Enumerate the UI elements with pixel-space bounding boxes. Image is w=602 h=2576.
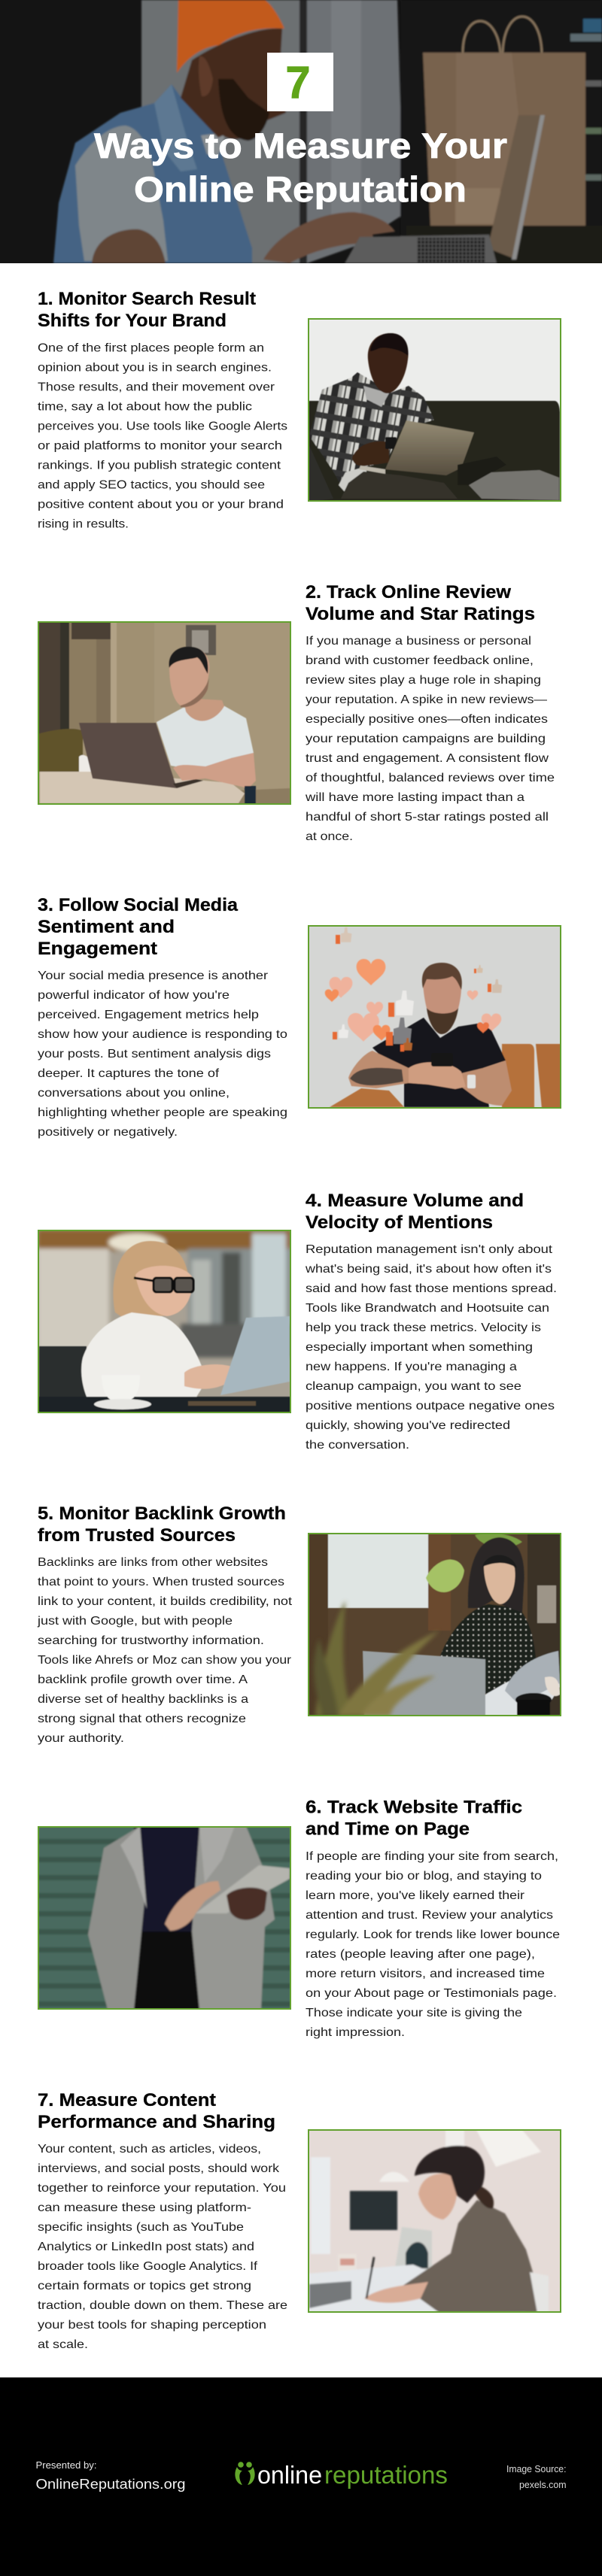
hero background photo [0, 0, 602, 263]
body text 2: your reputation. A spike in new reviews— [306, 693, 547, 706]
heading 2: 2. Track Online Review [306, 582, 511, 602]
body text 6: If people are finding your site from search, [306, 1850, 558, 1863]
body text 7: Analytics or LinkedIn post stats) and [38, 2241, 254, 2253]
photo 4: woman with glasses in office [39, 1231, 290, 1412]
body text 7: certain formats or topics get strong [38, 2280, 251, 2292]
body text 1: or paid platforms to monitor your search [38, 439, 282, 453]
heading 2: Volume and Star Ratings [306, 604, 535, 624]
body text 3: conversations about you online, [38, 1087, 230, 1100]
body text 3: positively or negatively. [38, 1126, 178, 1139]
heading 7: Performance and Sharing [38, 2112, 275, 2132]
section 5 [37, 1503, 561, 1745]
section 6 [38, 1798, 560, 2039]
body text 7: together to reinforce your reputation. You [38, 2182, 286, 2195]
photo 1: man on sofa with laptop [309, 320, 560, 500]
heading 5: 5. Monitor Backlink Growth [38, 1503, 286, 1524]
body text 6: attention and trust. Review your analytics [306, 1909, 553, 1922]
body text 5: diverse set of healthy backlinks is a [38, 1693, 248, 1706]
body text 7: Your content, such as articles, videos, [38, 2143, 261, 2156]
logo icon: two figures [235, 2462, 255, 2485]
body text 7: at scale. [38, 2338, 88, 2351]
body text 7: specific insights (such as YouTube [38, 2221, 244, 2234]
heading 6: 6. Track Website Traffic [306, 1798, 522, 1817]
body text 6: on your About page or Testimonials page. [306, 1987, 557, 2000]
body text 5: just with Google, but with people [37, 1615, 233, 1628]
body text 3: perceived. Engagement metrics help [38, 1009, 259, 1021]
heading 6: and Time on Page [306, 1819, 470, 1840]
body text 3: show how your audience is responding to [38, 1028, 287, 1041]
title: Ways to Measure Your [94, 126, 507, 165]
image source: Image Source: [506, 2463, 566, 2474]
body text 5: Tools like Ahrefs or Moz can show you your [38, 1654, 291, 1667]
heading 7: 7. Measure Content [38, 2090, 216, 2110]
body text 6 [306, 1850, 560, 2039]
body text 7: your best tools for shaping perception [38, 2319, 266, 2332]
photo 4 border [38, 1230, 290, 1412]
body text 1: positive content about you or your brand [38, 498, 284, 511]
heading 5: from Trusted Sources [38, 1525, 236, 1546]
photo 2 border [38, 622, 290, 804]
body text 1: rising in results. [38, 517, 129, 531]
presented by: OnlineReputations.org [36, 2476, 185, 2492]
footer background [0, 2377, 602, 2576]
heading 4: 4. Measure Volume and [306, 1191, 524, 1211]
body text 2 [305, 635, 555, 843]
heading 3 [38, 895, 239, 959]
hero banner [0, 0, 602, 263]
section 3 [38, 895, 561, 1139]
section 4 [38, 1191, 557, 1452]
heading 1: Shifts for Your Brand [38, 311, 227, 331]
body text 4: said and how fast those mentions spread. [306, 1282, 557, 1295]
section 1 [38, 289, 561, 531]
image source: pexels.com [519, 2479, 566, 2490]
body text 1: rankings. If you publish strategic content [38, 459, 281, 472]
body text 3 [38, 969, 287, 1139]
body text 4: the conversation. [306, 1439, 409, 1452]
body text 5: Backlinks are links from other websites [38, 1556, 268, 1569]
body text 7: broader tools like Google Analytics. If [38, 2260, 258, 2273]
photo 5 border [309, 1534, 561, 1716]
body text 6: right impression. [306, 2026, 405, 2039]
heading 4: Velocity of Mentions [306, 1212, 493, 1233]
photo 1 border [309, 319, 561, 501]
photo 5: woman reading beside plant [309, 1534, 560, 1715]
logo wordmark: reputations [324, 2461, 448, 2489]
body text 3: Your social media presence is another [38, 969, 268, 982]
body text 7: traction, double down on them. These are [38, 2299, 287, 2312]
body text 1: Those results, and their movement over [38, 381, 275, 394]
body text 5: searching for trustworthy information. [38, 1634, 264, 1647]
body text 3: highlighting whether people are speaking [38, 1106, 287, 1119]
body text 1: opinion about you is in search engines. [38, 361, 272, 375]
body text 2: handful of short 5-star ratings posted all [306, 811, 549, 824]
body text 5: backlink profile growth over time. A [38, 1673, 248, 1686]
body text 2: brand with customer feedback online, [306, 654, 534, 667]
body text 1: and apply SEO tactics, you should see [38, 478, 265, 492]
body text 5: that point to yours. When trusted sources [38, 1576, 284, 1588]
body text 2: your reputation campaigns are building [306, 733, 546, 745]
body text 7: can measure these using platform- [38, 2201, 251, 2214]
heading 6 [306, 1798, 522, 1840]
presented by: Presented by: [36, 2459, 96, 2471]
heading 3: 3. Follow Social Media [38, 895, 239, 915]
photo 3: man with phone, hearts and thumbs [309, 927, 560, 1107]
body text 6: reading your bio or blog, and staying to [306, 1870, 542, 1883]
body text 4: cleanup campaign, you want to see [306, 1380, 521, 1393]
body text 1: One of the first places people form an [38, 341, 264, 355]
body text 5: your authority. [38, 1732, 124, 1745]
body text 5 [37, 1556, 293, 1745]
body text 1: perceives you. Use tools like Google Alerts [38, 420, 287, 433]
body text 4: what's being said, it's about how often it's [305, 1263, 552, 1276]
logo wordmark [257, 2461, 448, 2489]
body text 7: interviews, and social posts, should work [38, 2162, 279, 2175]
heading 4 [306, 1191, 524, 1233]
heading 2 [306, 582, 535, 624]
body text 6: rates (people leaving after one page), [306, 1948, 535, 1961]
badge with number 7: 7 [286, 57, 310, 108]
body text 5: strong signal that others recognize [38, 1713, 246, 1725]
section 2 [38, 582, 555, 843]
heading 3: Engagement [38, 939, 157, 959]
body text 4: Reputation management isn't only about [306, 1243, 553, 1256]
body text 4: Tools like Brandwatch and Hootsuite can [306, 1302, 549, 1315]
title: Online Reputation [134, 169, 467, 209]
body text 6: more return visitors, and increased time [306, 1968, 545, 1980]
body text 2: trust and engagement. A consistent flow [306, 752, 549, 765]
photo 7 border [309, 2130, 561, 2312]
image source [506, 2463, 566, 2490]
body text 2: especially positive ones—often indicates [306, 713, 548, 726]
body text 3: your posts. But sentiment analysis digs [38, 1048, 271, 1060]
section 7 [38, 2090, 561, 2351]
body text 6: regularly. Look for trends like lower bounce [306, 1928, 560, 1941]
body text 5: link to your content, it builds credibility, not [38, 1595, 293, 1608]
title [94, 126, 507, 209]
presented by [36, 2459, 185, 2492]
photo 6: person in grey coat with tablet [39, 1828, 290, 2008]
heading 1 [38, 289, 256, 331]
body text 4 [305, 1243, 557, 1452]
body text 7 [38, 2143, 287, 2351]
logo [235, 2461, 448, 2489]
body text 1: time, say a lot about how the public [38, 400, 252, 414]
heading 7 [38, 2090, 275, 2132]
photo 3 border [309, 926, 561, 1108]
body text 4: quickly, showing you've redirected [306, 1419, 510, 1432]
body text 6: learn more, you've likely earned their [306, 1889, 524, 1902]
footer [0, 2377, 602, 2576]
body text 4: positive mentions outpace negative ones [306, 1400, 555, 1412]
body text 2: If you manage a business or personal [306, 635, 531, 648]
heading 5 [38, 1503, 286, 1546]
photo 7: woman writing at desk [309, 2131, 560, 2311]
body text 6: Those indicate your site is giving the [306, 2007, 522, 2019]
photo 2: man at laptop on table [39, 623, 290, 803]
body text 2: will have more lasting impact than a [305, 791, 524, 804]
badge with number 7 [267, 53, 333, 111]
body text 2: at once. [306, 830, 353, 843]
body text 4: especially important when something [306, 1341, 533, 1354]
body text 2: review sites play a huge role in shaping [306, 674, 541, 687]
body text 2: of thoughtful, balanced reviews over time [306, 772, 555, 784]
heading 1: 1. Monitor Search Result [38, 289, 256, 309]
body text 4: help you track these metrics. Velocity is [306, 1321, 541, 1334]
heading 3: Sentiment and [38, 917, 175, 937]
logo wordmark: online [257, 2461, 322, 2489]
body text 1 [38, 341, 287, 531]
body text 4: new happens. If you're managing a [306, 1361, 517, 1373]
photo 6 border [38, 1827, 290, 2009]
body text 3: powerful indicator of how you're [38, 989, 230, 1002]
body text 3: deeper. It captures the tone of [38, 1067, 220, 1080]
